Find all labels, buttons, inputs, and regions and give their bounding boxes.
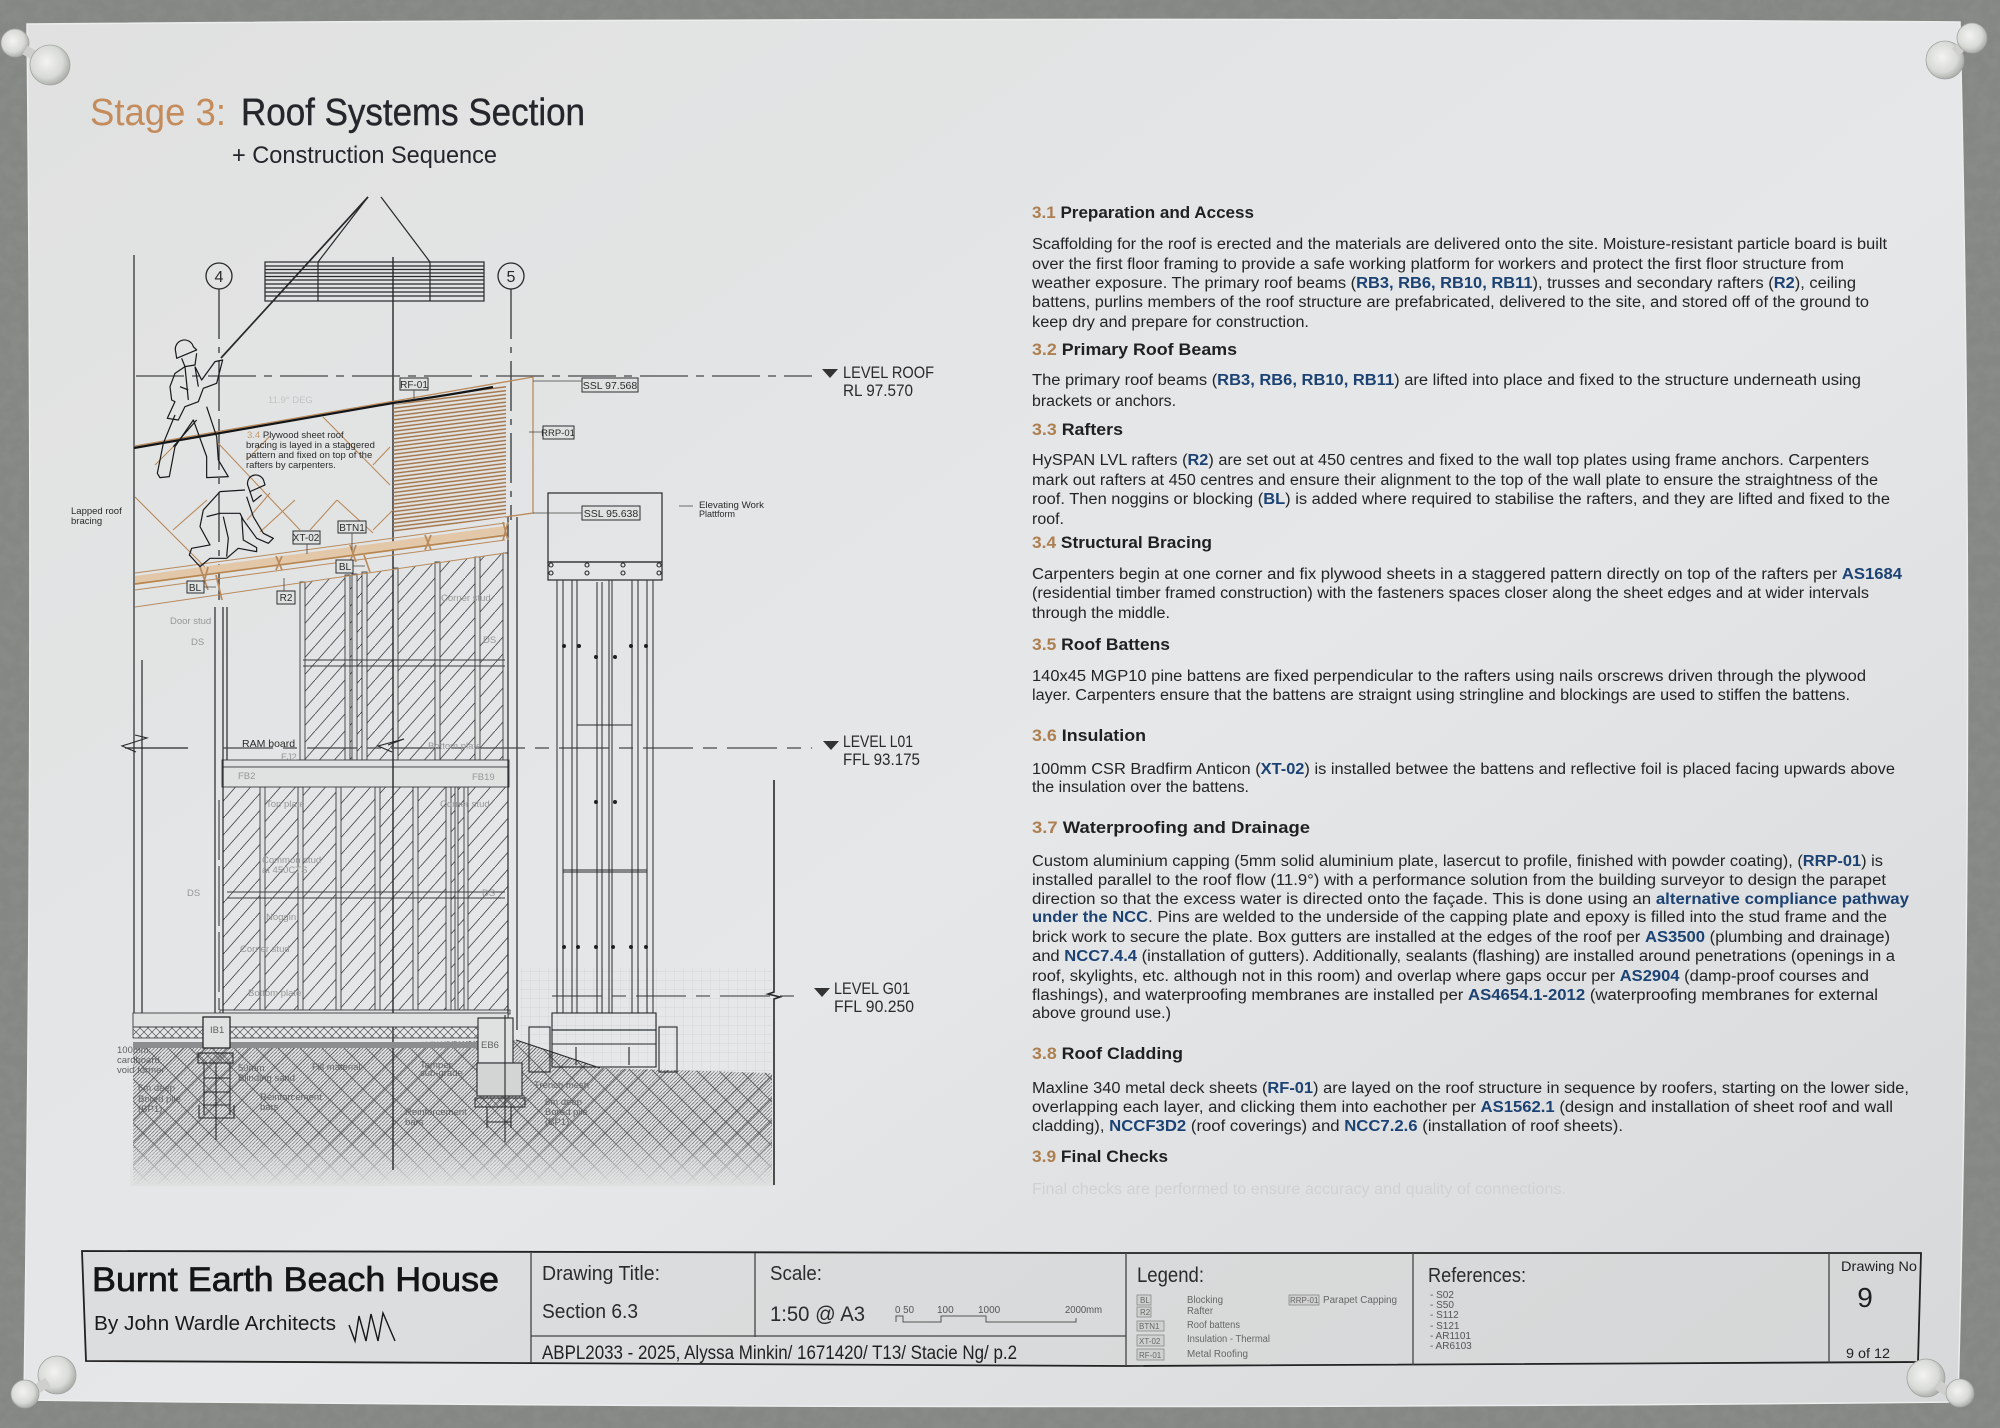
section 3.1: Scaffolding for the roof is erected and the materials are delivered onto the site. Moisture-resistant particle board is built — [1032, 236, 1888, 253]
section 3.3: 3.3 Rafters — [1032, 421, 1123, 439]
references: - AR6103 — [1430, 1341, 1472, 1352]
level lines — [136, 376, 812, 1185]
level marker: roof — [822, 364, 934, 400]
drawing title — [542, 1263, 660, 1323]
section 3.4: through the middle. — [1032, 605, 1170, 622]
references: - S02 — [1430, 1290, 1454, 1301]
course details: ABPL2033 - 2025, Alyssa Minkin/ 1671420/ T13/ Stacie Ng/ p.2 — [542, 1343, 1017, 1364]
parapet capping — [135, 377, 533, 517]
wall framing: lower storey — [220, 760, 510, 1014]
tag labels: RF-01 — [400, 380, 428, 391]
black roof line — [134, 387, 493, 448]
level marker: G01: FFL 90.250 — [834, 998, 914, 1016]
faint component labels: Top plate — [266, 799, 305, 810]
footing IB1 and pile — [198, 1017, 234, 1140]
references: References: — [1428, 1265, 1526, 1287]
faint component labels: Corner stud — [440, 799, 490, 810]
section 3.4: Carpenters begin at one corner and fix plywood sheets in a staggered pattern directly on top of the rafters per AS1684 — [1032, 566, 1902, 583]
grid marker 4 — [206, 263, 232, 289]
level marker: G01: LEVEL G01 — [834, 980, 910, 998]
ground hatching — [130, 968, 775, 1186]
tag labels: XT-02 — [293, 533, 320, 544]
faint component labels: Bottom plate — [248, 988, 301, 999]
section 3.8: overlapping each layer, and clicking them into eachother per AS1562.1 (design and installation of sheet roof and wall — [1032, 1099, 1893, 1116]
faint component labels: Fill material — [312, 1062, 361, 1073]
section 3.1: keep dry and prepare for construction. — [1032, 314, 1309, 331]
legend: BTN1 — [1139, 1322, 1160, 1331]
plywood staggered joints — [135, 417, 393, 567]
drawing number: 9 of 12 — [1846, 1345, 1890, 1361]
faint component labels: 50mm — [238, 1063, 264, 1074]
scale and scale bar: 1000 — [978, 1305, 1001, 1316]
faint component labels: at 450CTS — [262, 865, 307, 876]
section 3.9 — [1032, 1148, 1566, 1198]
section 3.8: Maxline 340 metal deck sheets ( RF-01) are layed on the roof structure in sequence by roofers, starting on the lower side, — [1032, 1080, 1909, 1097]
references: - S121 — [1430, 1321, 1460, 1332]
title: Roof Systems Section — [241, 92, 585, 134]
faint component labels: Reinforcement — [260, 1092, 322, 1103]
title: + Construction Sequence — [232, 142, 497, 169]
legend: Metal Roofing — [1187, 1349, 1248, 1360]
section 3.7: above ground use.) — [1032, 1005, 1171, 1022]
section 3.7: direction so that the excess water is directed onto the façade. This is done using an alternative compliance pathway — [1032, 891, 1909, 908]
level marker: roof: RL 97.570 — [843, 382, 913, 400]
section 3.9: Final checks are performed to ensure accuracy and quality of connections. — [1032, 1181, 1566, 1198]
section 3.5 — [1032, 636, 1866, 704]
section 3.5: 140x45 MGP10 pine battens are fixed perpendicular to the rafters using nails orscrews driven through the plywood — [1032, 668, 1866, 685]
section 3.2 — [1032, 341, 1861, 410]
legend: RF-01 — [1139, 1351, 1162, 1360]
footing EB6 and pile — [475, 1015, 525, 1142]
section 3.4 — [1032, 534, 1902, 622]
metal roof hatch — [393, 384, 506, 533]
scale and scale bar: 100 — [937, 1305, 954, 1316]
title block frame — [82, 1251, 1921, 1366]
section 3.8: 3.8 Roof Cladding — [1032, 1045, 1183, 1063]
section 3.6 — [1032, 727, 1895, 796]
faint component labels: FB2 — [238, 771, 255, 782]
faint component labels: DS — [483, 635, 496, 646]
tag labels: SSL 95.638 — [584, 508, 638, 520]
tag labels — [187, 378, 693, 604]
faint component labels: DS — [187, 888, 200, 899]
section 3.1 — [1031, 204, 1888, 331]
drawing notes: pattern and fixed on top of the — [246, 450, 372, 461]
section 3.7 — [1032, 819, 1909, 1022]
drawing notes: bracing is layed in a staggered — [246, 440, 375, 451]
legend: Blocking — [1187, 1295, 1223, 1306]
grid marker 5: 5 — [507, 269, 516, 286]
faint component labels: EB6 — [481, 1040, 499, 1051]
rafter layers — [135, 526, 505, 584]
section 3.6: the insulation over the battens. — [1032, 779, 1249, 796]
level marker: L01: FFL 93.175 — [843, 751, 920, 769]
section 3.9: 3.9 Final Checks — [1032, 1148, 1168, 1166]
legend: Roof battens — [1187, 1320, 1240, 1331]
title: Stage 3: — [90, 92, 226, 134]
faint component labels: Door stud — [170, 616, 211, 627]
faint component labels: Corner stud — [441, 593, 491, 604]
faint component labels: bars — [405, 1117, 424, 1128]
scale and scale bar: 1:50 @ A3 — [770, 1303, 865, 1326]
section 3.4: 3.4 Structural Bracing — [1032, 534, 1212, 552]
drawing number: 9 — [1857, 1282, 1873, 1313]
push pins: bottom left — [11, 1356, 76, 1408]
section 3.3 — [1032, 421, 1890, 528]
faint component labels: Common stud — [262, 855, 321, 866]
faint component labels: FB19 — [472, 772, 495, 783]
faint component labels: IB1 — [210, 1025, 224, 1036]
section 3.8: cladding), NCCF3D2 (roof coverings) and NCC7.2.6 (installation of roof sheets). — [1032, 1118, 1623, 1135]
drawing title: Section 6.3 — [542, 1301, 638, 1323]
drawing notes: Lapped roof — [71, 506, 122, 517]
drawing notes: bracing — [71, 516, 102, 527]
section 3.1: 3.1 Preparation and Access — [1032, 204, 1254, 222]
push pins: top right — [1926, 23, 1987, 79]
section 3.2: brackets or anchors. — [1032, 393, 1176, 410]
faint component labels: 100mm — [117, 1045, 149, 1056]
tag labels: BL — [189, 583, 202, 594]
section 3.2: The primary roof beams ( RB3, RB6, RB10, RB11 ) are lifted into place and fixed to the structure underneath using — [1032, 372, 1861, 389]
section 3.3: roof. — [1032, 511, 1064, 528]
scale and scale bar: Scale: — [770, 1263, 822, 1285]
scale and scale bar: 0 50 — [895, 1305, 914, 1316]
studs, door frame and column lines — [122, 255, 517, 1170]
section 3.6: 100mm CSR Bradfirm Anticon ( XT-02) is installed betwee the battens and reflective foil is placed facing upwards above — [1032, 761, 1895, 778]
tag labels: BL — [339, 562, 352, 573]
push pins: bottom right — [1907, 1359, 1974, 1407]
legend: Legend: — [1137, 1264, 1204, 1287]
section 3.7: and NCC7.4.4 (installation of gutters). Additionally, sealants (flashing) are installed around penetrations (openings in a — [1032, 948, 1895, 965]
faint component labels: (BP1) — [138, 1104, 162, 1115]
drawing title: Drawing Title: — [542, 1263, 660, 1285]
section 3.7: Custom aluminium capping (5mm solid aluminium plate, lasercut to profile, finished with powder coating), ( RRP-01) is — [1032, 853, 1883, 870]
legend: BL — [1140, 1296, 1150, 1305]
section 3.7: brick work to secure the plate. Box gutters are installed at the edges of the roof per AS3500 (plumbing and drainage) — [1032, 929, 1890, 946]
level marker: L01 — [823, 733, 920, 769]
faint component labels: Tamper — [420, 1060, 452, 1071]
worker crouching — [189, 475, 273, 567]
section drawing — [71, 197, 934, 1186]
faint component labels: bars — [260, 1102, 279, 1113]
faint component labels: FJ2 — [281, 752, 297, 763]
section 3.5: layer. Carpenters ensure that the battens are straignt using stringline and blockings are used to stiffen the battens. — [1032, 687, 1850, 704]
faint component labels: sub-grade — [420, 1068, 463, 1079]
legend — [1137, 1264, 1397, 1360]
section 3.7: flashings), and waterproofing membranes are installed per AS4654.1-2012 (waterproofing membranes for external — [1032, 987, 1878, 1004]
push pins: top left — [1, 29, 70, 85]
faint component labels: cardboard — [117, 1055, 160, 1066]
references: - S112 — [1430, 1310, 1459, 1321]
faint component labels: 11.9° DEG — [268, 395, 313, 406]
floor slab — [133, 1013, 508, 1048]
references — [1428, 1265, 1526, 1352]
legend: RRP-01 — [1290, 1296, 1319, 1305]
faint component labels: 6m deep — [138, 1083, 175, 1094]
drawing notes: rafters by carpenters. — [246, 460, 336, 471]
drawing notes: Elevating Work — [699, 500, 765, 510]
faint component labels: 6m deep — [545, 1097, 582, 1108]
title — [90, 92, 585, 169]
project name: By John Wardle Architects — [94, 1313, 336, 1335]
faint component labels: Reinforcement — [405, 1107, 467, 1118]
section 3.7: installed parallel to the roof flow (11.9°) with a performance solution from the building surveyor to design the parapet — [1032, 872, 1887, 889]
section 3.7: under the NCC . Pins are welded to the underside of the capping plate and epoxy is filled into the stud frame and the — [1032, 909, 1887, 926]
section 3.1: battens, purlins members of the roof structure are prefabricated, delivered to the site, and stored off of the ground to — [1032, 294, 1869, 311]
wall framing: upper storey — [300, 553, 508, 760]
icon: architect logo — [349, 1313, 395, 1341]
level marker: L01: LEVEL L01 — [843, 733, 913, 751]
project name: Burnt Earth Beach House — [92, 1261, 499, 1299]
legend: XT-02 — [1139, 1337, 1161, 1346]
section 3.3: roof. Then noggins or blocking ( BL) is added where required to stabilise the rafters, and they are lifted and fixed to the — [1032, 491, 1890, 508]
section 3.8 — [1032, 1045, 1909, 1135]
section 3.2: 3.2 Primary Roof Beams — [1032, 341, 1237, 359]
grid marker 5 — [498, 263, 524, 289]
faint component labels: Bottom plate — [428, 741, 481, 752]
drawing number: Drawing No — [1841, 1258, 1917, 1274]
legend: Rafter — [1187, 1306, 1214, 1317]
drawing number — [1841, 1258, 1917, 1361]
section 3.7: roof, skylights, etc. although not in this room) and overlap where gaps occur per AS2904 (damp-proof courses and — [1032, 968, 1869, 985]
faint component labels: Bored pile — [138, 1094, 181, 1105]
faint component labels: Corner stud — [240, 944, 290, 955]
section 3.3: mark out rafters at 450 centres and ensure their alignment to the top of the wall plate to ensure the straightness of the — [1032, 472, 1878, 489]
level marker: G01 — [814, 980, 914, 1016]
section 3.1: weather exposure. The primary roof beams ( RB3, RB6, RB10, RB11 ), trusses and secondary rafters ( R2), ceiling — [1031, 275, 1856, 292]
faint component labels: Blinding sand — [238, 1073, 295, 1084]
crane-lifted bundle of beams — [221, 197, 484, 358]
drawing notes: RAM board — [242, 738, 295, 750]
section 3.7: 3.7 Waterproofing and Drainage — [1032, 819, 1310, 837]
roof assembly — [134, 377, 533, 607]
section 3.6: 3.6 Insulation — [1032, 727, 1146, 745]
drawing notes — [71, 430, 765, 750]
references: - AR1101 — [1430, 1331, 1471, 1342]
section 3.4: (residential timber framed construction) with the fasteners spaces closer along the sheet edges and at wider intervals — [1032, 585, 1869, 602]
worker standing with rope — [157, 340, 228, 478]
faint component labels: (BP1) — [545, 1117, 569, 1128]
grid marker 4: 4 — [215, 269, 224, 286]
title block — [82, 1251, 1921, 1366]
legend: Parapet Capping — [1323, 1295, 1397, 1306]
faint component labels: Trench mesh — [534, 1080, 589, 1091]
legend: R2 — [1140, 1308, 1151, 1317]
faint component labels: Noggin — [266, 912, 296, 923]
construction sequence text — [1031, 204, 1909, 1198]
section 3.3: HySPAN LVL rafters ( R2) are set out at 450 centres and fixed to the wall top plates using frame anchors. Carpenters — [1032, 452, 1869, 469]
faint component labels — [117, 395, 589, 1128]
tag labels: BTN1 — [339, 523, 365, 534]
level marker: roof: LEVEL ROOF — [843, 364, 934, 382]
section 3.1: over the first floor framing to provide a safe working platform for workers and protect the first floor structure from — [1032, 256, 1844, 273]
faint component labels: Bored pile — [545, 1107, 588, 1118]
faint component labels: void former — [117, 1065, 165, 1076]
drawing notes: 3.4 Plywood sheet roof — [247, 430, 344, 441]
tag labels: SSL 97.568 — [583, 380, 637, 392]
project name — [92, 1261, 499, 1341]
references: - S50 — [1430, 1300, 1454, 1311]
faint component labels: DS — [191, 637, 204, 648]
drawing notes: Plattform — [699, 509, 735, 519]
legend: Insulation - Thermal — [1187, 1334, 1270, 1345]
scale and scale bar: 2000mm — [1065, 1305, 1102, 1316]
section 3.5: 3.5 Roof Battens — [1032, 636, 1170, 654]
tag labels: R2 — [280, 593, 293, 604]
elevating work platform — [516, 493, 677, 1072]
faint component labels: DS — [482, 888, 495, 899]
blocking — [200, 522, 508, 600]
scale and scale bar — [770, 1263, 1102, 1326]
tag labels: RRP-01 — [541, 428, 575, 439]
